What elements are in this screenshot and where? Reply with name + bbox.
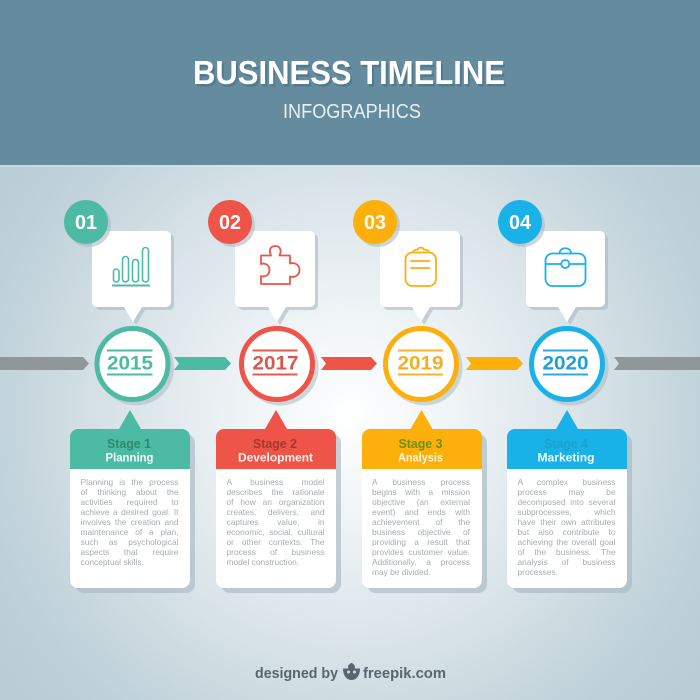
stage 1 milestone <box>64 200 174 406</box>
arrow: yellow <box>466 357 523 370</box>
number badge 02: 02 <box>219 212 241 234</box>
body text: or other contexts. The <box>226 537 324 547</box>
body text: process of business <box>226 547 324 557</box>
background <box>0 165 700 700</box>
stage name: Analysis <box>398 450 443 464</box>
body text: achieve a desired goal. It <box>80 507 178 517</box>
speech bubble 1 shadow <box>95 234 174 325</box>
stage 3 milestone <box>353 200 463 406</box>
body text: of how an organization <box>226 497 324 507</box>
body text: aspects that require <box>80 547 178 557</box>
stage name: Planning <box>106 450 154 464</box>
arrow: red <box>321 357 377 370</box>
panel header <box>70 410 190 469</box>
panel body <box>70 460 190 588</box>
stage 4 milestone <box>498 200 608 406</box>
year circle 2015: 2015 <box>107 354 153 374</box>
panel: stage 1 planning <box>70 410 195 593</box>
stage label: Stage 4 <box>544 436 589 451</box>
body text: achieving the overall goal <box>518 537 616 547</box>
panel header <box>216 410 336 469</box>
footer credit: freepik.com <box>363 666 446 682</box>
body text: objective (an external <box>372 497 470 507</box>
icon: briefcase <box>546 248 586 286</box>
year circle 2019 <box>386 328 462 406</box>
year circle 2020: 2020 <box>542 354 588 374</box>
body text <box>80 477 180 577</box>
body text: captures value, in <box>226 517 324 527</box>
speech bubble 3 <box>380 231 460 322</box>
number badge 01 <box>64 200 111 247</box>
speech bubble 2 shadow <box>238 234 318 325</box>
panel: stage 2 development <box>216 410 341 593</box>
body text: provides customer value. <box>372 547 470 557</box>
body text <box>372 477 472 587</box>
panel shadow <box>367 434 487 593</box>
body text: model construction. <box>226 557 299 567</box>
body text: creates, delivers, and <box>226 507 324 517</box>
number badge 04: 04 <box>509 212 532 234</box>
arrow: teal <box>174 357 231 370</box>
panel shadow <box>75 434 195 593</box>
year circle 2017: 2017 <box>252 354 298 374</box>
year circle 2017 <box>242 328 318 406</box>
stage label: Stage 1 <box>107 436 151 451</box>
speech bubble 4 <box>526 231 605 322</box>
panel body <box>362 460 482 588</box>
body text: maintenance of a plan, <box>80 527 178 537</box>
panel body <box>507 460 627 588</box>
icon: puzzle piece <box>261 246 300 284</box>
number badge 01: 01 <box>75 212 97 234</box>
speech bubble 2 <box>235 231 315 322</box>
body text: conceptual skills. <box>80 557 144 567</box>
stage label: Stage 3 <box>398 436 442 451</box>
arrow: grey end <box>614 357 700 370</box>
speech bubble 3 shadow <box>383 234 463 325</box>
body text: process may be <box>518 487 616 497</box>
subtitle: INFOGRAPHICS <box>283 101 421 123</box>
arrow: grey start <box>0 357 89 370</box>
panel header <box>507 410 627 469</box>
year circle 2020 <box>532 328 608 406</box>
body text <box>518 477 618 587</box>
body text: business objective of <box>372 527 470 537</box>
body text: subprocesses, which <box>518 507 616 517</box>
number badge 03 <box>353 200 400 247</box>
icon: bar chart <box>112 248 150 286</box>
body text: may be divided. <box>372 567 431 577</box>
body text: Planning is the process <box>80 477 178 487</box>
body text: Additionally, a process <box>372 557 470 567</box>
icon: clipboard <box>406 248 436 286</box>
body text: decomposed into several <box>518 497 616 507</box>
body text: providing a result that <box>372 537 470 547</box>
year circle 2019: 2019 <box>398 354 444 374</box>
panel body <box>216 460 336 588</box>
title: BUSINESS TIMELINE <box>193 54 505 91</box>
body text: but also contribute to <box>518 527 616 537</box>
panel: stage 4 marketing <box>507 410 632 593</box>
body text: such as psychological <box>80 537 178 547</box>
timeline arrows <box>0 357 700 370</box>
body text: describes the rationale <box>226 487 324 497</box>
number badge 02 <box>208 200 255 247</box>
body text: activities required to <box>80 497 178 507</box>
icon: freepik logo <box>343 663 360 680</box>
body text: have their own attributes <box>518 517 616 527</box>
panel shadow <box>512 434 632 593</box>
panel shadow <box>221 434 341 593</box>
body text: event) and ends with <box>372 507 470 517</box>
stage 2 milestone <box>208 200 318 406</box>
year circle 2015 <box>97 328 174 406</box>
speech bubble 1 <box>92 231 171 322</box>
body text: begins with a mission <box>372 487 470 497</box>
header band <box>0 0 700 166</box>
body text: analysis of business <box>518 557 616 567</box>
body text: of the business. The <box>518 547 616 557</box>
body text: A complex business <box>518 477 616 487</box>
body text: A business process <box>372 477 470 487</box>
body text: processes. <box>518 567 558 577</box>
footer credit: designed by <box>255 666 338 682</box>
body text: involves the creation and <box>80 517 178 527</box>
panel header <box>362 410 482 469</box>
number badge 03: 03 <box>364 212 386 234</box>
panel: stage 3 analysis <box>362 410 487 593</box>
footer credit <box>255 663 446 682</box>
stage name: Marketing <box>538 450 594 464</box>
body text: of thinking about the <box>80 487 178 497</box>
body text <box>226 477 326 577</box>
stage label: Stage 2 <box>253 436 297 451</box>
stage name: Development <box>238 450 313 464</box>
body text: A business model <box>226 477 324 487</box>
speech bubble 4 shadow <box>529 234 608 325</box>
body text: economic, social, cultural <box>226 527 324 537</box>
body text: achievement of the <box>372 517 470 527</box>
number badge 04 <box>498 200 545 247</box>
title: BUSINESS TIMELINE <box>195 56 507 94</box>
